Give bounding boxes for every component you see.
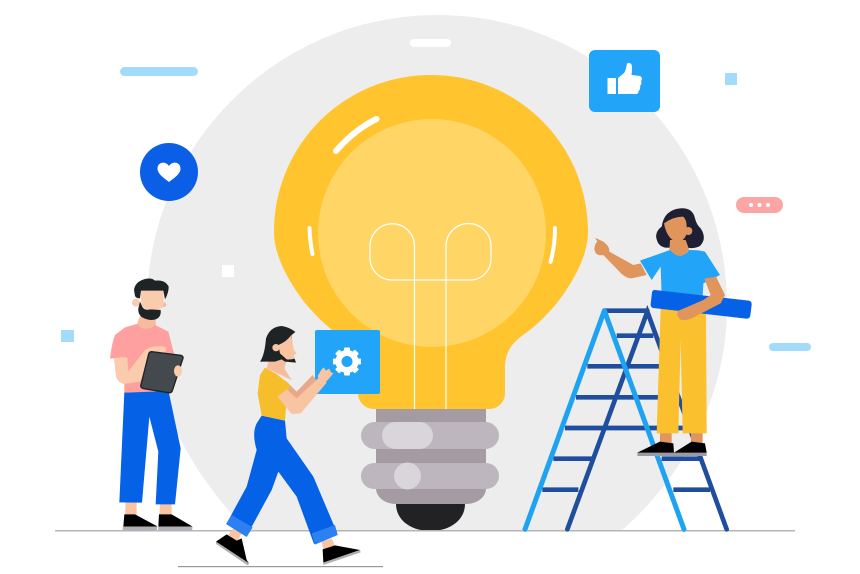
- beard: [138, 302, 161, 320]
- ear: [684, 227, 692, 235]
- icon: chat bubble: [736, 197, 783, 213]
- stepladder: [525, 311, 727, 529]
- bulb inner glow: [318, 119, 546, 347]
- icon: heart badge: [140, 143, 198, 201]
- front arm: [277, 377, 327, 414]
- ankles: [660, 432, 703, 444]
- ladder front legs: [525, 311, 684, 529]
- shirt: [258, 368, 290, 421]
- face: [278, 335, 297, 360]
- trousers: [657, 308, 707, 433]
- neck: [137, 312, 156, 330]
- light bulb: [274, 75, 588, 531]
- shirt: [640, 250, 720, 297]
- shoes: [216, 534, 360, 563]
- filament: [370, 224, 491, 409]
- face: [141, 290, 163, 310]
- ear: [132, 299, 140, 307]
- gear card: [315, 330, 380, 394]
- trousers: [119, 390, 181, 504]
- woman carrying card: [216, 326, 361, 566]
- neck: [669, 240, 689, 259]
- hair: [134, 278, 169, 299]
- hand: [174, 365, 182, 377]
- bulb screw base: [376, 409, 486, 504]
- decorative shapes: [61, 39, 811, 351]
- arm: [114, 346, 166, 384]
- bulb glass: [274, 75, 588, 409]
- tablet: [141, 352, 183, 393]
- glass highlights: [310, 119, 555, 262]
- carried blue panel: [651, 290, 752, 319]
- background circle: [147, 15, 727, 531]
- ankles: [125, 500, 172, 517]
- icon: thumbs up badge: [589, 50, 660, 112]
- hair: [260, 326, 296, 363]
- shirt: [110, 324, 175, 393]
- ladder rungs and back legs: [542, 311, 727, 529]
- neck: [267, 356, 292, 380]
- hair: [656, 208, 704, 248]
- ear: [272, 344, 280, 351]
- man with tablet: [110, 278, 193, 530]
- trousers: [227, 416, 337, 544]
- lower ground line: [178, 566, 383, 567]
- hand: [318, 367, 333, 383]
- trouser cuffs: [226, 515, 338, 545]
- shoes: [123, 514, 192, 527]
- platform shadow: [637, 452, 707, 456]
- ground line: [55, 530, 795, 532]
- woman on ladder: [594, 208, 752, 456]
- icon: gear: [333, 348, 361, 376]
- face: [664, 217, 687, 242]
- ankles: [228, 528, 335, 551]
- holding arm: [677, 277, 725, 320]
- bulb black tip: [396, 504, 465, 531]
- pointing arm: [594, 238, 647, 278]
- rear arm: [285, 375, 317, 403]
- shoes: [637, 442, 707, 453]
